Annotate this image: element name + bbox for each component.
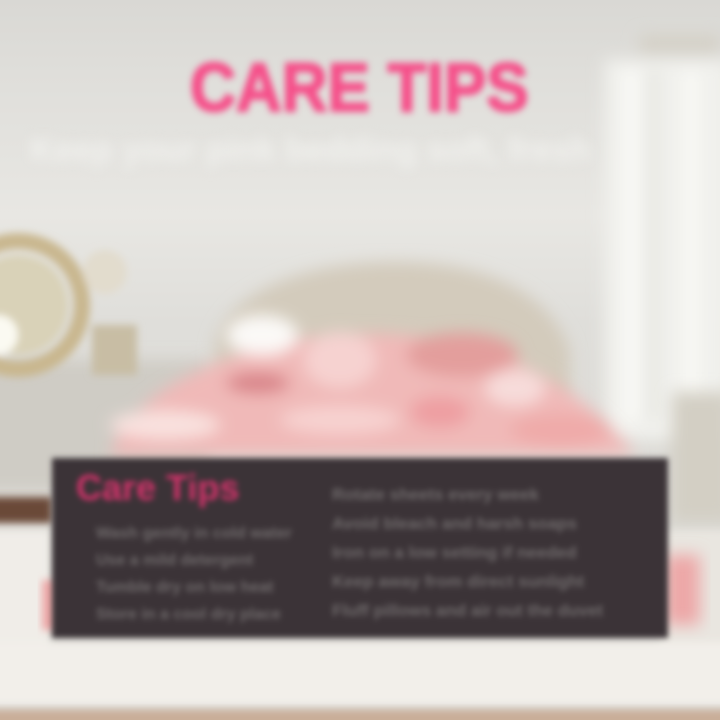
tips text right column [330,485,604,620]
window curtain [605,35,720,440]
bedding [110,315,635,455]
tips text left column [95,525,292,623]
right table [672,392,720,522]
lower wall [0,360,210,490]
pink fabric behind panel [665,555,700,625]
headboard [215,262,570,400]
panel: care tips [52,458,668,638]
tips text right column: Rotate sheets every week [332,485,539,504]
tips text right column: Iron on a low setting if needed [332,543,577,562]
tips text left column: Tumble dry on low heat [96,579,274,596]
foreground white surface [0,530,50,660]
round mirror [0,241,137,375]
left dark floor [0,497,52,523]
tips text right column: Avoid bleach and harsh soaps [332,514,577,533]
tips text right column: Fluff pillows and air out the duvet [332,601,603,620]
panel heading: Care Tips [76,467,239,508]
tips text left column: Store in a cool dry place [96,606,281,623]
tips text right column: Keep away from direct sunlight [332,572,584,591]
tips text left column: Use a mild detergent [96,552,253,569]
title: CARE TIPS [190,49,529,126]
tips text left column: Wash gently in cold water [96,525,292,542]
